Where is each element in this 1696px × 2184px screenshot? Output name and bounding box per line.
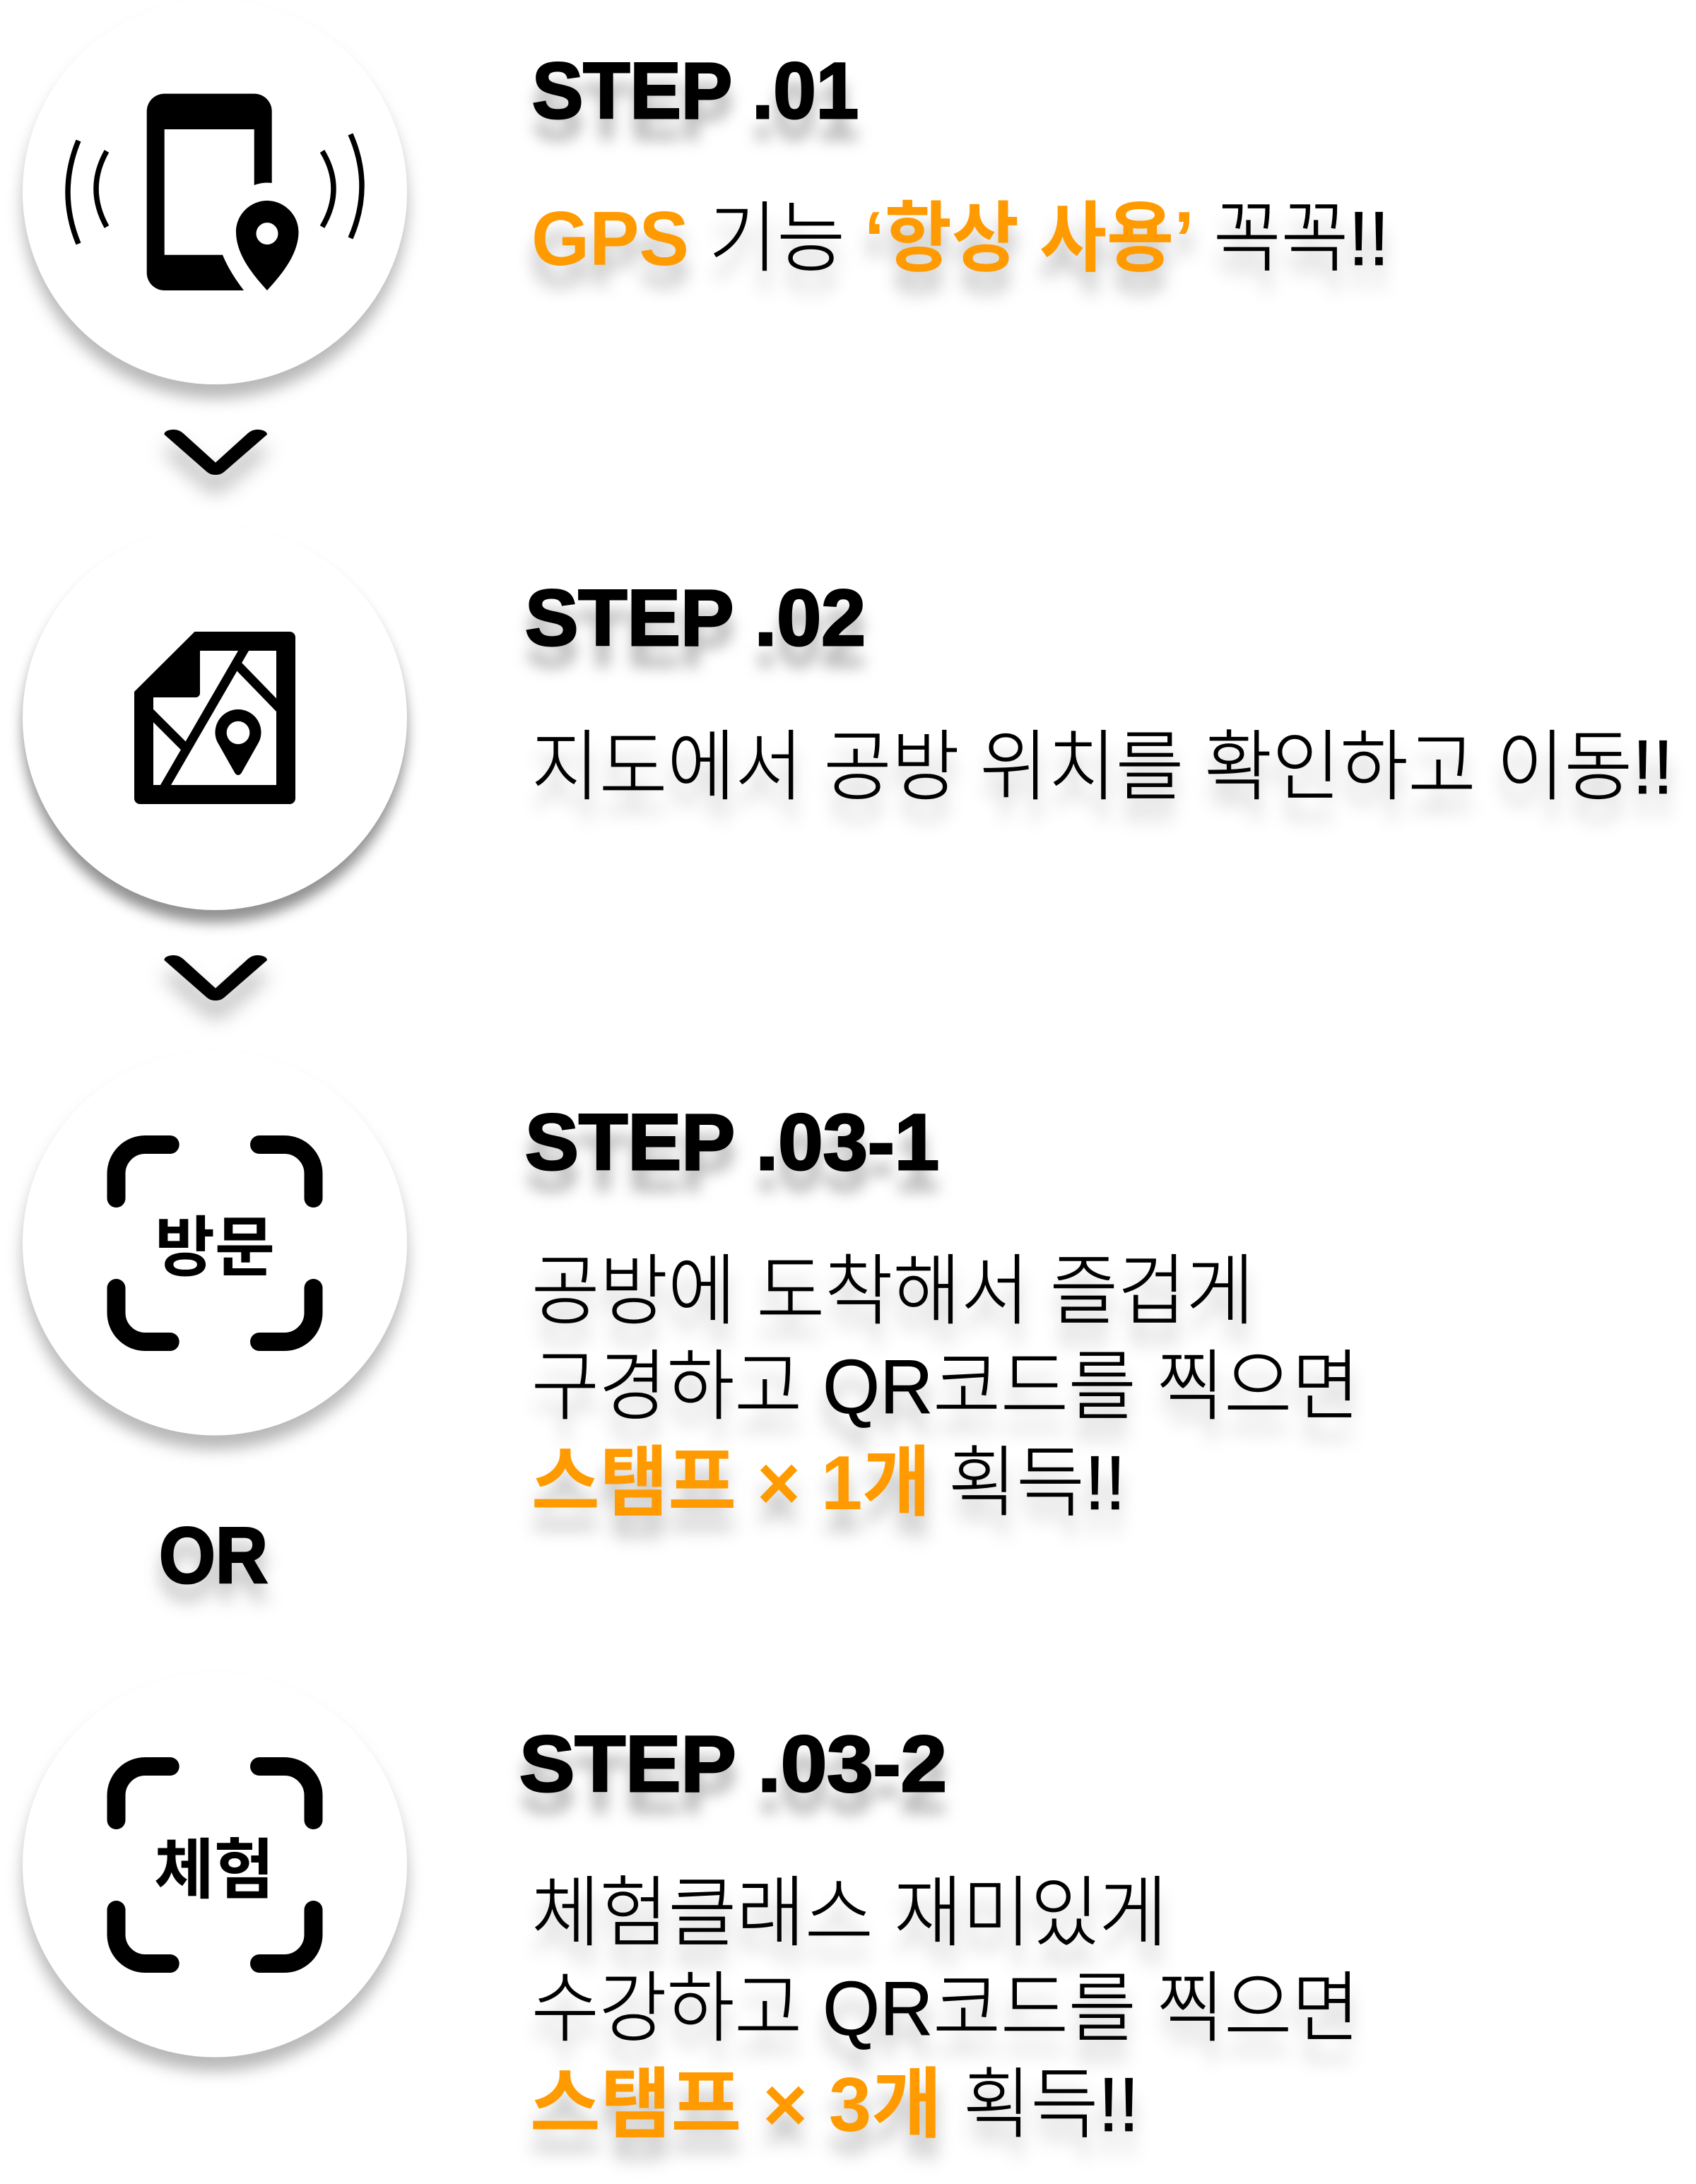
- step 2 heading: STEP .02: [525, 574, 866, 662]
- GPS highlight: GPS: [531, 196, 689, 282]
- experience label: 체험: [154, 1817, 274, 1912]
- step 1 circle: [23, 0, 407, 384]
- OR label: OR: [159, 1511, 268, 1600]
- earn text: 획득!!: [948, 1440, 1126, 1526]
- arrow: step 1 to step 2: [164, 430, 267, 475]
- earn text: 획득!!: [963, 2062, 1139, 2148]
- stamp count highlight: 스탬프 × 3개: [530, 2062, 942, 2148]
- phone body: [147, 94, 272, 290]
- step 3-2 circle: [23, 1673, 407, 2058]
- scan brackets: [116, 1766, 314, 1964]
- step 1 heading: STEP .01: [532, 47, 859, 135]
- step 3-2 description: [530, 1870, 1360, 2148]
- map pin: [215, 709, 261, 775]
- line 2: 구경하고 QR코드를 찍으면: [531, 1344, 1360, 1430]
- feature text: 기능: [709, 196, 845, 282]
- icon: QR scan frame with experience label: [116, 1766, 314, 1964]
- scan brackets: [116, 1145, 314, 1342]
- stamp count highlight: 스탬프 × 1개: [531, 1440, 931, 1526]
- line 2: 수강하고 QR코드를 찍으면: [531, 1966, 1360, 2052]
- arrow: step 2 to step 3: [164, 955, 267, 1000]
- location pin: [236, 201, 298, 290]
- signal waves: [68, 134, 362, 244]
- step 3-1 heading: STEP .03-1: [525, 1098, 939, 1186]
- visit label: 방문: [155, 1194, 275, 1289]
- icon: map with pin: [134, 632, 295, 804]
- line 1: 체험클래스 재미있게: [531, 1870, 1167, 1956]
- step 2 circle: [23, 526, 407, 910]
- step 3-1 circle: [23, 1051, 407, 1436]
- step 3-1 description: [531, 1249, 1360, 1526]
- step 3-2 heading: STEP .03-2: [519, 1720, 947, 1808]
- icon: QR scan frame with visit label: [116, 1145, 314, 1342]
- step 1 description: [531, 196, 1389, 282]
- step 2 description: 지도에서 공방 위치를 확인하고 이동!!: [531, 724, 1673, 810]
- map sheet outline: [134, 632, 295, 804]
- line 1: 공방에 도착해서 즐겁게: [531, 1249, 1254, 1335]
- emphasis text: 꼭꼭!!: [1213, 196, 1389, 282]
- always-use highlight: ‘항상 사용’: [864, 196, 1194, 282]
- map roads: [148, 644, 283, 792]
- icon: phone with GPS pin and signal waves: [68, 94, 362, 290]
